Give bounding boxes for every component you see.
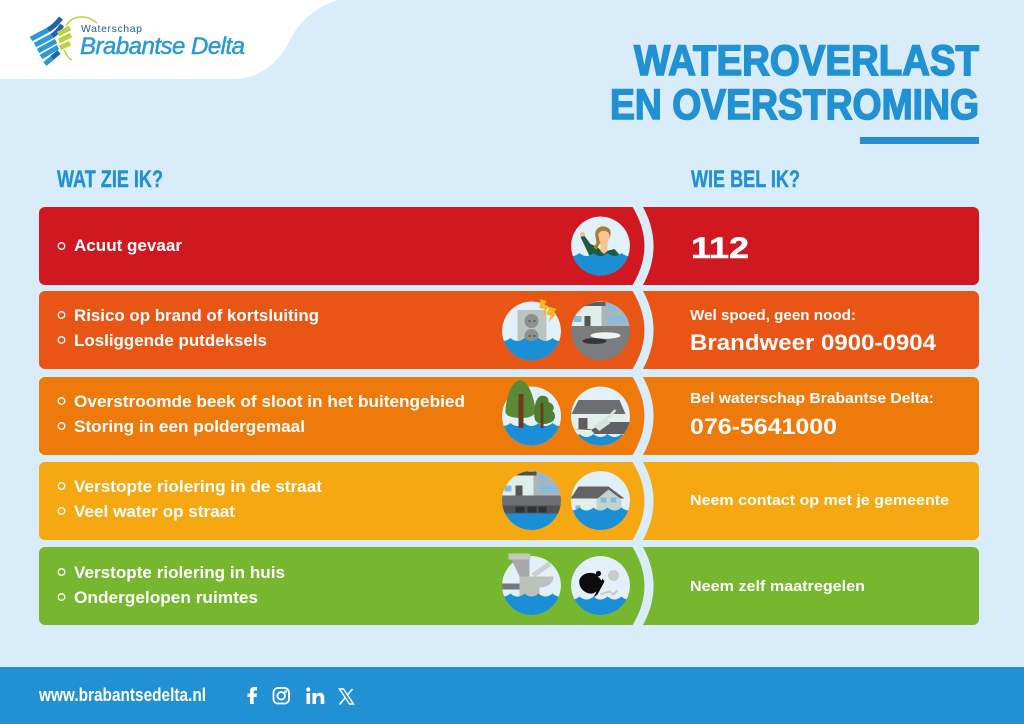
row: overstroomde beek [39, 377, 979, 455]
phone: brandweer [690, 307, 937, 355]
bullet text [58, 307, 319, 350]
icon: instagram [274, 688, 289, 704]
icon detail: toilet tank [512, 560, 530, 576]
bullet text: Losliggende putdeksels [74, 332, 267, 350]
icon: street with blocked drains [502, 470, 562, 532]
title underline [860, 137, 979, 144]
curved divider [636, 204, 649, 628]
row: brand of kortsluiting [39, 291, 979, 371]
icon: pumping station [571, 386, 630, 446]
bullet text: Storing in een poldergemaal [74, 418, 305, 436]
icon: swimming person with bag [571, 556, 630, 615]
bullet text: Verstopte riolering in huis [74, 564, 285, 582]
icon: socket in water [502, 299, 561, 360]
logo text: Brabantse Delta [80, 33, 245, 60]
heading: wat zie ik: WAT ZIE IK? [57, 166, 163, 193]
logo mark [31, 17, 97, 64]
bullet text: Risico op brand of kortsluiting [74, 307, 319, 325]
row: acuut gevaar [39, 207, 979, 286]
bullet text: Veel water op straat [74, 503, 236, 521]
bullet text: Ondergelopen ruimtes [74, 589, 258, 607]
phone: waterschap [690, 390, 934, 439]
title: EN OVERSTROMING [610, 81, 979, 129]
bullet text [58, 564, 285, 607]
icon: trees in water [502, 380, 561, 446]
icon: X [340, 689, 354, 704]
phone: 112: 112 [691, 232, 749, 265]
icon detail: lightning [540, 299, 556, 322]
bullet text [58, 478, 323, 521]
website: www.brabantsedelta.nl [38, 685, 206, 705]
phone: brandweer: Wel spoed, geen nood: [690, 307, 856, 324]
phone: brandweer: Brandweer 0900-0904 [690, 330, 937, 355]
bullet text [58, 393, 465, 436]
action: gemeente: Neem contact op met je gemeente [690, 492, 949, 509]
logo panel [0, 0, 338, 79]
action: zelf maatregelen: Neem zelf maatregelen [690, 578, 865, 595]
phone: waterschap: 076-5641000 [690, 414, 837, 439]
title [610, 37, 979, 129]
icon: open manhole [570, 301, 630, 360]
icon: person in water [571, 216, 630, 276]
bullet text: Verstopte riolering in de straat [74, 478, 323, 496]
phone: waterschap: Bel waterschap Brabantse Delta: [690, 390, 934, 407]
bullet text: Overstroomde beek of sloot in het buitengebied [74, 393, 465, 411]
icon: flooded house [571, 471, 630, 530]
icon: linkedin [306, 687, 324, 704]
row: verstopte riolering straat [39, 462, 979, 540]
logo text: Waterschap [81, 23, 142, 35]
icon: facebook [248, 687, 257, 704]
row: riolering in huis [39, 547, 979, 630]
title: WATEROVERLAST [634, 37, 979, 85]
bullet text: Acuut gevaar [74, 237, 183, 255]
heading: wie bel ik: WIE BEL IK? [691, 166, 800, 193]
footer [0, 667, 1024, 724]
icon: toilet [502, 554, 561, 615]
